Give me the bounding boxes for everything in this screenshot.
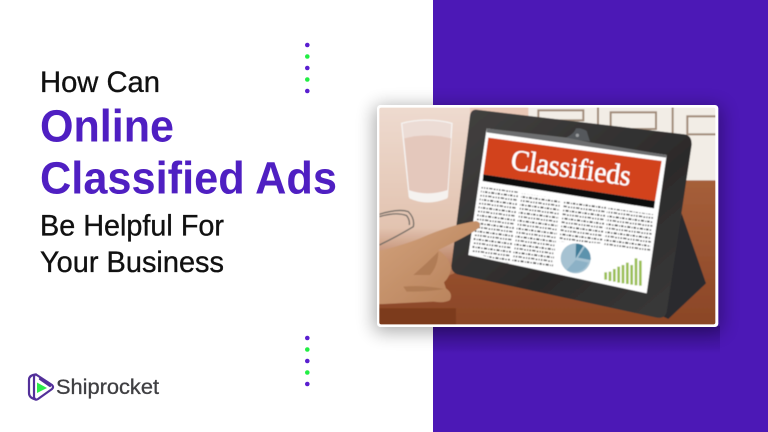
photo: hand pointing at tablet showing classifieds page (377, 105, 720, 328)
icon: play triangles (29, 374, 53, 400)
wall frames (538, 105, 717, 134)
white left background (0, 0, 433, 432)
heading line: Online: Online (40, 100, 174, 152)
heading line: Your Business: Your Business (40, 246, 224, 279)
glasses (379, 210, 414, 245)
photo shadow (374, 106, 722, 332)
banner title: Classifieds (509, 144, 633, 193)
heading line: Be Helpful For: Be Helpful For (40, 210, 224, 242)
wall and table (379, 108, 471, 276)
green bar chart (604, 258, 642, 286)
decorative dots top (305, 43, 310, 93)
tablet stand (660, 213, 706, 319)
hand (377, 221, 480, 304)
heading line: How Can: How Can (40, 66, 160, 99)
wordmark: Shiprocket (56, 376, 159, 399)
pie chart (561, 243, 591, 273)
red banner (483, 138, 662, 201)
decorative dots bottom (305, 336, 310, 386)
photo frame (377, 105, 718, 327)
purple right panel (433, 0, 768, 432)
camera notch (564, 128, 590, 142)
tablet body (451, 110, 692, 318)
black strip (483, 174, 655, 208)
screen (468, 128, 667, 293)
title (40, 66, 337, 279)
newspaper columns (472, 187, 653, 268)
logo: Shiprocket (29, 374, 159, 400)
heading line: Classified Ads: Classified Ads (40, 152, 337, 204)
water glass (402, 120, 452, 202)
